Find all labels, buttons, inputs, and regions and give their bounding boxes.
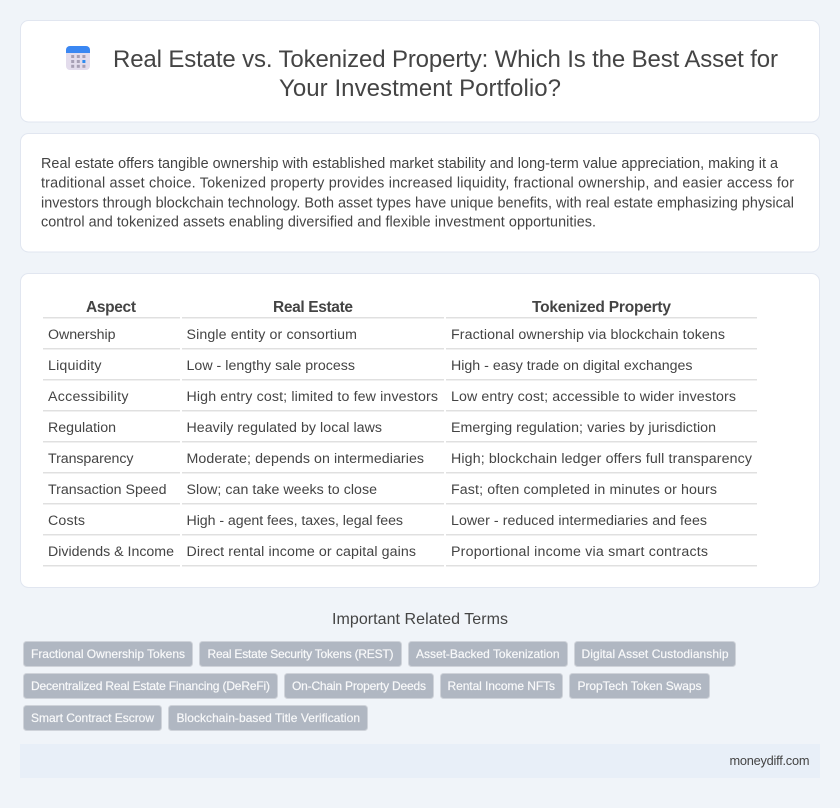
- panel: summary text: Real estate offers tangible ownership with established market stability and long-term value appreciation, making it a: [41, 156, 778, 172]
- table rows: Proportional income via smart contracts: [451, 544, 708, 560]
- panel: summary text: [20, 134, 820, 252]
- table header: [86, 299, 671, 316]
- related term tags: [24, 642, 736, 730]
- table rows: Fractional ownership via blockchain tokens: [451, 327, 725, 343]
- title: Real Estate vs. Tokenized Property: Which Is the Best Asset for: [113, 46, 778, 73]
- table rows: Moderate; depends on intermediaries: [186, 451, 424, 467]
- related term tags: Fractional Ownership Tokens: [31, 647, 185, 661]
- table header: Real Estate: [273, 299, 353, 316]
- heading: related terms: Important Related Terms: [332, 611, 508, 628]
- related term tags: PropTech Token Swaps: [578, 679, 702, 693]
- table header: Aspect: [86, 299, 136, 316]
- table rows: Direct rental income or capital gains: [186, 544, 416, 560]
- related term tags: Real Estate Security Tokens (REST): [208, 647, 394, 661]
- footer bar: moneydiff.com: [730, 753, 810, 768]
- related term tags: Blockchain-based Title Verification: [176, 711, 360, 725]
- footer bar: [20, 744, 820, 778]
- related term tags: Smart Contract Escrow: [31, 711, 154, 725]
- table rows: Fast; often completed in minutes or hours: [451, 482, 717, 498]
- related term tags: Rental Income NFTs: [448, 679, 555, 693]
- table rows: [48, 327, 753, 560]
- panel: summary text: investors through blockchain technology. Both asset types have unique benefits, with real estate emphasizing physical: [41, 196, 794, 212]
- panel: comparison table: [20, 274, 820, 588]
- table rows: Liquidity: [48, 358, 102, 374]
- table rows: Low entry cost; accessible to wider investors: [451, 389, 736, 405]
- table rows: Slow; can take weeks to close: [186, 482, 377, 498]
- table rows: Ownership: [48, 327, 116, 343]
- related term tags: On-Chain Property Deeds: [292, 679, 426, 693]
- related term tags: Digital Asset Custodianship: [582, 647, 729, 661]
- table rows: High - agent fees, taxes, legal fees: [186, 513, 403, 529]
- panel: summary text: traditional asset choice. Tokenized property provides increased liquidity, fractional ownership, and easier access for: [41, 176, 794, 192]
- related term tags: Asset-Backed Tokenization: [416, 647, 560, 661]
- table header: Tokenized Property: [532, 299, 671, 316]
- related term tags: Decentralized Real Estate Financing (DeReFi): [31, 679, 270, 693]
- table rows: Emerging regulation; varies by jurisdiction: [451, 420, 716, 436]
- title: [113, 46, 778, 102]
- table rows: Regulation: [48, 420, 116, 436]
- title: Your Investment Portfolio?: [279, 75, 561, 102]
- table rows: Dividends & Income: [48, 544, 174, 560]
- table rows: Transparency: [48, 451, 134, 467]
- table rows: High entry cost; limited to few investors: [186, 389, 438, 405]
- panel: summary text: control and tokenized assets enabling diversified and flexible investment opportunities.: [41, 214, 596, 230]
- table rows: High - easy trade on digital exchanges: [451, 358, 692, 374]
- panel: title card: [20, 20, 820, 122]
- table rows: High; blockchain ledger offers full transparency: [451, 451, 753, 467]
- table rows: Lower - reduced intermediaries and fees: [451, 513, 707, 529]
- table rows: Low - lengthy sale process: [186, 358, 355, 374]
- table rows: Costs: [48, 513, 85, 529]
- table rows: Single entity or consortium: [186, 327, 357, 343]
- table rows: Accessibility: [48, 389, 129, 405]
- icon: calendar: [66, 46, 90, 70]
- table rows: Heavily regulated by local laws: [186, 420, 382, 436]
- table rows: Transaction Speed: [48, 482, 166, 498]
